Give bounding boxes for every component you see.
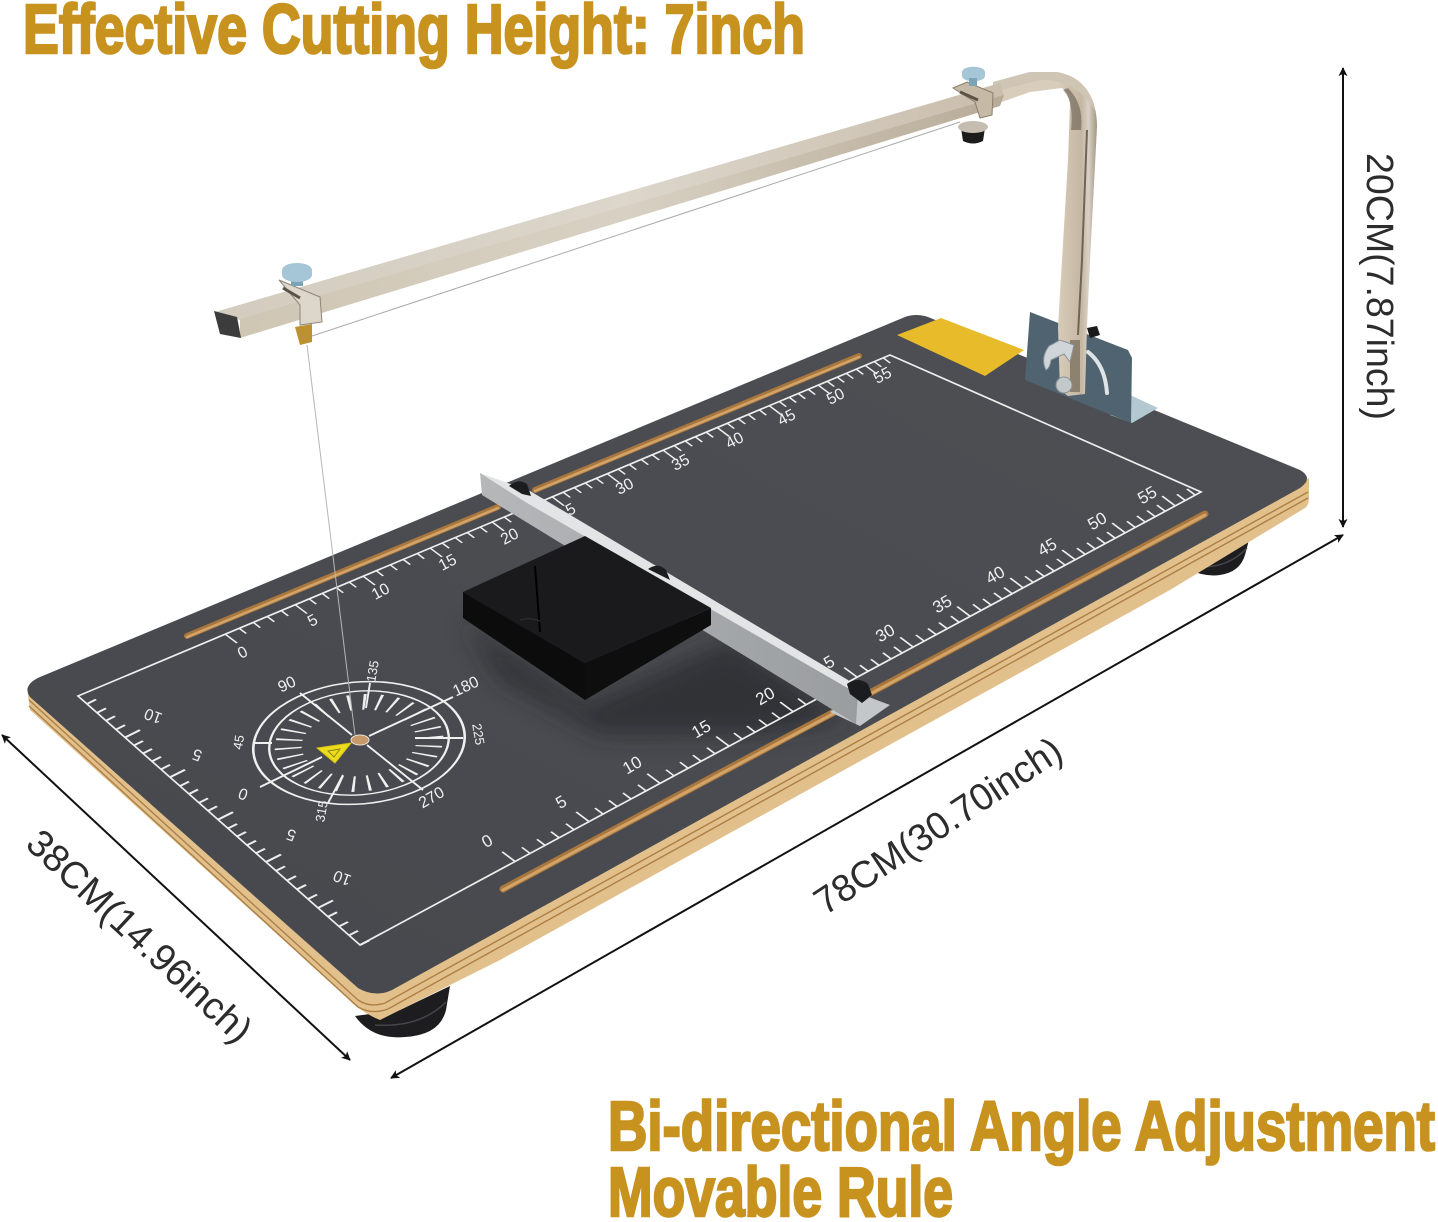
dial angle labels: 225 <box>469 722 488 746</box>
ruler numbers: bottom scale: 50 <box>1084 508 1110 534</box>
ruler numbers: bottom scale: 30 <box>872 620 898 646</box>
ruler numbers: top scale: 40 <box>723 429 747 453</box>
ruler numbers: top scale: 5 <box>305 611 321 631</box>
ruler numbers: top scale <box>235 364 895 663</box>
ruler numbers: top scale: 55 <box>871 364 895 388</box>
wing nut and bolts <box>1044 340 1074 393</box>
ruler numbers: left scale: 5 <box>190 745 205 764</box>
dial angle labels <box>230 659 488 823</box>
arm: post and bend <box>993 72 1097 396</box>
ruler numbers: bottom scale <box>478 482 1160 852</box>
ruler numbers: top scale: 30 <box>613 475 637 499</box>
ruler numbers: left scale: 10 <box>142 704 165 726</box>
ruler numbers: bottom scale: 55 <box>1134 482 1160 508</box>
dimension label: length: 78CM(30.70inch) <box>807 730 1070 924</box>
ruler numbers: top scale: 5 <box>563 500 579 520</box>
angle dial <box>230 659 488 823</box>
icon: warning triangle <box>317 743 351 763</box>
bracket: angle adjustment plate <box>1025 312 1158 423</box>
foot: front <box>355 986 450 1037</box>
ruler numbers: left scale: 0 <box>236 784 251 803</box>
ruler ticks: left scale <box>87 696 375 945</box>
ruler numbers: bottom scale: 15 <box>688 716 714 742</box>
board: dark top surface <box>28 315 1307 994</box>
cutting arm <box>214 67 1097 396</box>
dial angle labels: 45 <box>230 734 247 751</box>
dimension label: width: 38CM(14.96inch) <box>18 822 260 1052</box>
clamp: far end <box>279 263 322 345</box>
dial angle labels: 90 <box>275 673 299 696</box>
hot wire <box>307 122 960 735</box>
clamp: near end <box>953 67 993 144</box>
board: plywood edge <box>27 478 1309 1020</box>
ruler numbers: bottom scale: 5 <box>552 792 570 813</box>
ruler numbers: top scale: 50 <box>824 385 848 409</box>
ruler ticks: bottom scale <box>502 485 1195 861</box>
center hole <box>351 735 369 745</box>
ruler numbers: bottom scale: 0 <box>478 831 496 852</box>
ruler numbers: bottom scale: 35 <box>929 591 955 617</box>
foot: rear right <box>1190 536 1250 575</box>
movable rule: aluminium fence <box>480 473 890 726</box>
ruler numbers: left scale <box>142 704 354 888</box>
dial angle labels: 270 <box>416 784 448 812</box>
ruler numbers: top scale: 35 <box>669 451 693 475</box>
ruler numbers: left scale: 5 <box>284 825 299 844</box>
ruler numbers: bottom scale: 40 <box>982 562 1008 588</box>
dial rings and graduations <box>248 673 470 813</box>
dial angle labels: 135 <box>363 659 382 683</box>
ruler numbers: top scale: 45 <box>775 406 799 430</box>
knob: middle <box>648 566 670 580</box>
ruler numbers: bottom scale: 20 <box>752 683 778 709</box>
ruler numbers: top scale: 20 <box>498 525 522 549</box>
arm end cap <box>214 311 241 338</box>
slot: upper track <box>187 356 859 637</box>
ruler numbers: top scale: 15 <box>436 551 460 575</box>
ruler numbers: left scale: 10 <box>331 866 354 888</box>
ruler numbers: bottom scale: 45 <box>1034 534 1060 560</box>
ruler numbers: top scale: 0 <box>235 643 251 663</box>
ruler numbers: top scale: 10 <box>369 580 393 604</box>
dial long index lines <box>255 683 463 803</box>
ruler ticks: top scale <box>225 358 895 643</box>
slot: lower track <box>503 514 1205 890</box>
ruler numbers: bottom scale: 10 <box>619 752 645 778</box>
dial angle labels: 180 <box>450 674 482 700</box>
shadow under block and fence <box>463 620 850 735</box>
dimension arrow: width <box>2 735 350 1060</box>
arm: horizontal bar top face <box>215 83 1004 320</box>
knob: front <box>847 680 872 703</box>
dimension arrow: height <box>1342 68 1344 527</box>
black block <box>463 536 711 700</box>
ruler numbers: bottom scale: 5 <box>820 652 838 673</box>
dimension arrow: length <box>391 535 1343 1078</box>
arm: horizontal bar front face <box>240 95 1004 338</box>
screw: blue thumb <box>282 263 312 286</box>
dimension label: height: 20CM(7.87inch) <box>1358 153 1400 420</box>
knob: rear <box>509 481 531 496</box>
ruler frame <box>78 355 1201 945</box>
yellow sticker <box>897 318 1024 376</box>
dial angle labels: 315 <box>312 799 331 823</box>
